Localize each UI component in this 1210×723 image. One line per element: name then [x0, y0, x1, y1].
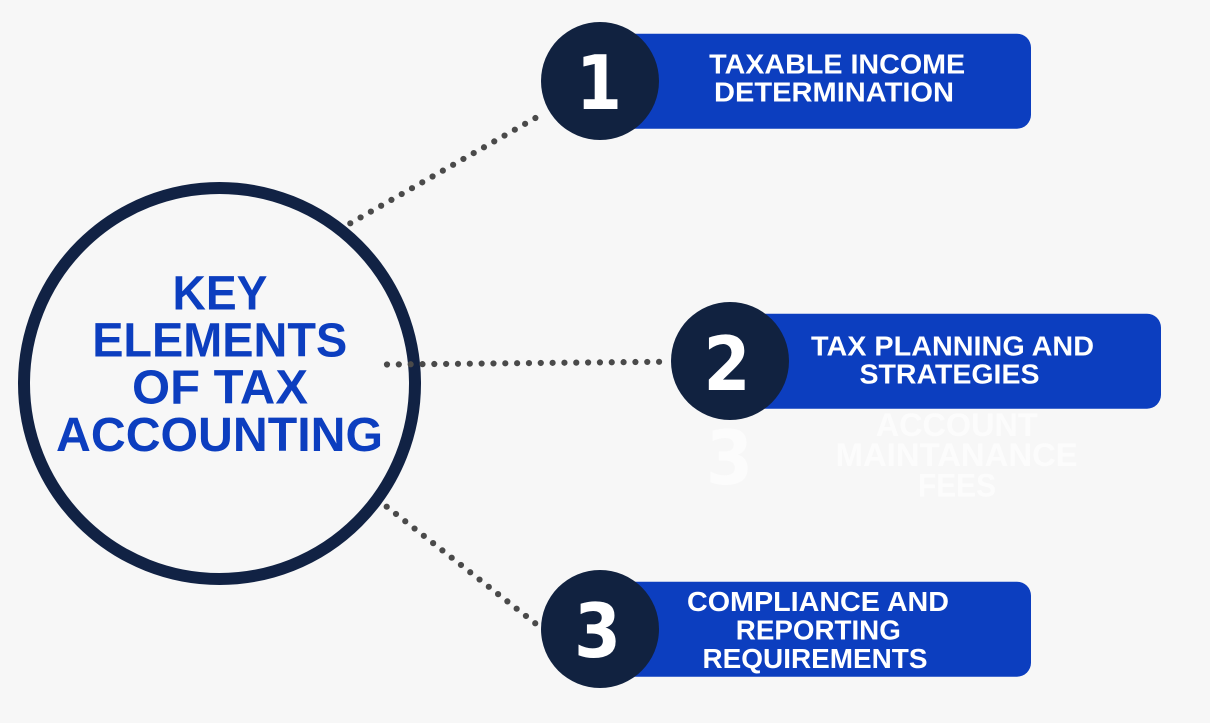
faint label	[836, 407, 1078, 504]
item 1 label	[709, 48, 965, 108]
item 2 label: TAX PLANNING AND	[811, 330, 1094, 361]
item 2	[671, 302, 1161, 420]
dotted connector: circle to item 1	[350, 118, 535, 223]
item 2 label: STRATEGIES	[860, 358, 1040, 389]
faint hidden item: account maintenance fees	[706, 407, 1078, 504]
title: ACCOUNTING	[56, 409, 383, 462]
faint label: ACCOUNT	[876, 407, 1038, 443]
item 3 label	[687, 586, 949, 674]
title: KEY	[172, 267, 268, 320]
item 1 number: 1	[576, 39, 622, 127]
item 1	[541, 22, 1031, 140]
faint label: FEES	[918, 468, 996, 504]
title	[56, 267, 383, 462]
item 2 bar	[730, 314, 1161, 409]
item 3 label: COMPLIANCE AND	[687, 586, 949, 617]
item 3 label: REPORTING	[736, 614, 901, 646]
item 3 label: REQUIREMENTS	[702, 643, 928, 674]
item 2 number badge	[671, 302, 789, 420]
title: ELEMENTS	[92, 314, 347, 368]
dotted connector: circle to item 2	[387, 362, 659, 364]
central circle	[24, 188, 415, 579]
item 3	[541, 570, 1031, 688]
title: OF TAX	[132, 362, 308, 415]
item 1 bar	[600, 34, 1031, 129]
faint label: MAINTANANCE	[836, 437, 1078, 473]
item 2 label	[811, 330, 1094, 389]
item 1 label: TAXABLE INCOME	[709, 48, 965, 80]
item 3 bar	[600, 582, 1031, 677]
dotted connector: circle to item 3	[387, 507, 535, 623]
item 3 number: 3	[574, 587, 621, 675]
item 1 number badge	[541, 22, 659, 140]
item 2 number: 2	[704, 320, 750, 408]
faint number: 3	[706, 414, 753, 502]
item 1 label: DETERMINATION	[714, 77, 954, 108]
item 3 number badge	[541, 570, 659, 688]
